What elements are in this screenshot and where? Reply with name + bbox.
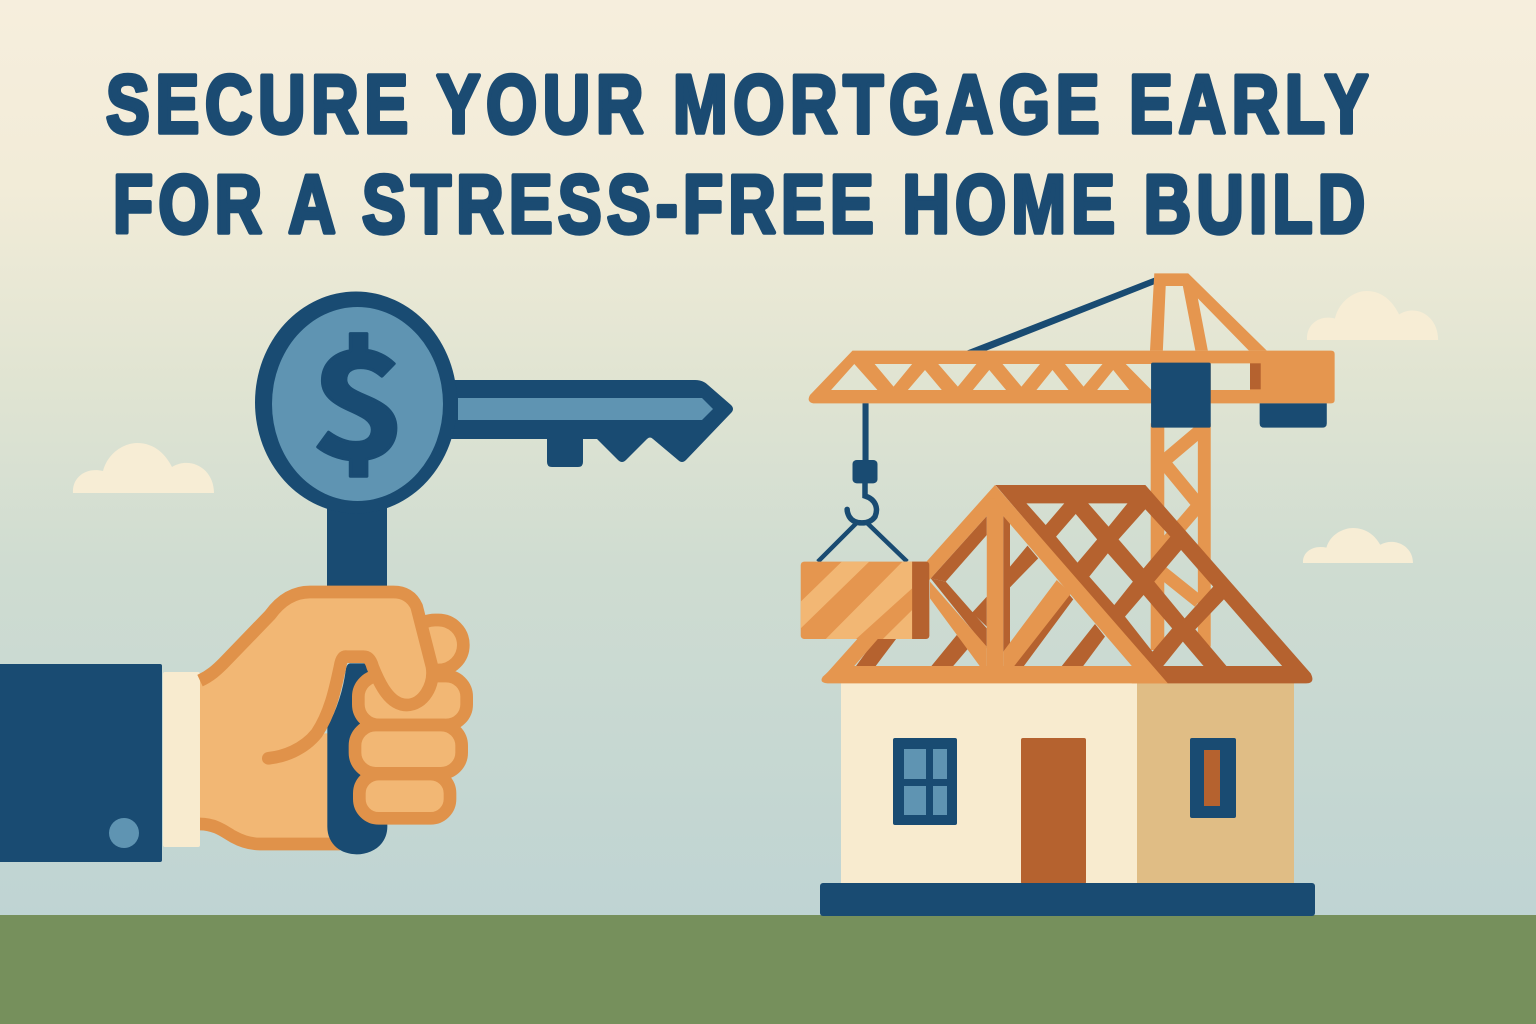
crease tip [262, 752, 275, 765]
title: SECURE YOUR MORTGAGE EARLY [106, 57, 1368, 150]
key handle lower section [327, 663, 387, 854]
ring finger [355, 725, 462, 773]
crane jib [809, 351, 1335, 403]
dollar sign: $ [310, 288, 407, 500]
thumb fill [357, 607, 432, 705]
hook [847, 483, 876, 523]
door [1021, 738, 1086, 884]
counterweight block [1260, 403, 1327, 428]
crane and roof frame [801, 273, 1335, 683]
front window [893, 738, 957, 825]
hoist cable [863, 403, 869, 461]
key with dollar head [255, 288, 733, 592]
key head coin [272, 307, 443, 501]
foundation [820, 883, 1315, 916]
little finger [359, 774, 450, 818]
hook block [852, 460, 878, 483]
ground [0, 915, 1536, 1024]
title [106, 57, 1368, 250]
suspended lumber block [801, 562, 929, 639]
counterweight strip [1250, 363, 1261, 389]
cloud: lower right [1303, 528, 1413, 563]
hand gripping key [200, 592, 467, 854]
key head outer ring [255, 292, 457, 514]
crane tower [1151, 423, 1211, 650]
key blade with teeth [445, 380, 733, 467]
key handle stem [327, 500, 387, 592]
crane cab block [1151, 363, 1211, 428]
palm [200, 592, 432, 844]
crane cable stay [967, 277, 1155, 351]
hand outline, thumb and crease [200, 592, 432, 758]
suit sleeve [0, 664, 162, 862]
roof front brown struts [856, 516, 1105, 666]
house [820, 680, 1315, 916]
palm bottom outline [200, 824, 340, 844]
sleeve button [109, 818, 139, 848]
index fingertip [410, 620, 463, 670]
front wall [841, 680, 1137, 884]
side window [1190, 738, 1236, 818]
title: FOR A STRESS-FREE HOME BUILD [113, 157, 1365, 250]
crane mast top [1150, 273, 1267, 351]
cloud: left [73, 443, 214, 493]
lifting slings [818, 522, 907, 562]
shirt cuff [163, 672, 200, 847]
key blade inset [458, 398, 713, 420]
side wall [1137, 680, 1294, 884]
cloud: upper right [1307, 291, 1438, 340]
roof right side lattice [995, 485, 1312, 683]
roof front orange frame [821, 485, 1168, 683]
middle finger [358, 676, 467, 725]
